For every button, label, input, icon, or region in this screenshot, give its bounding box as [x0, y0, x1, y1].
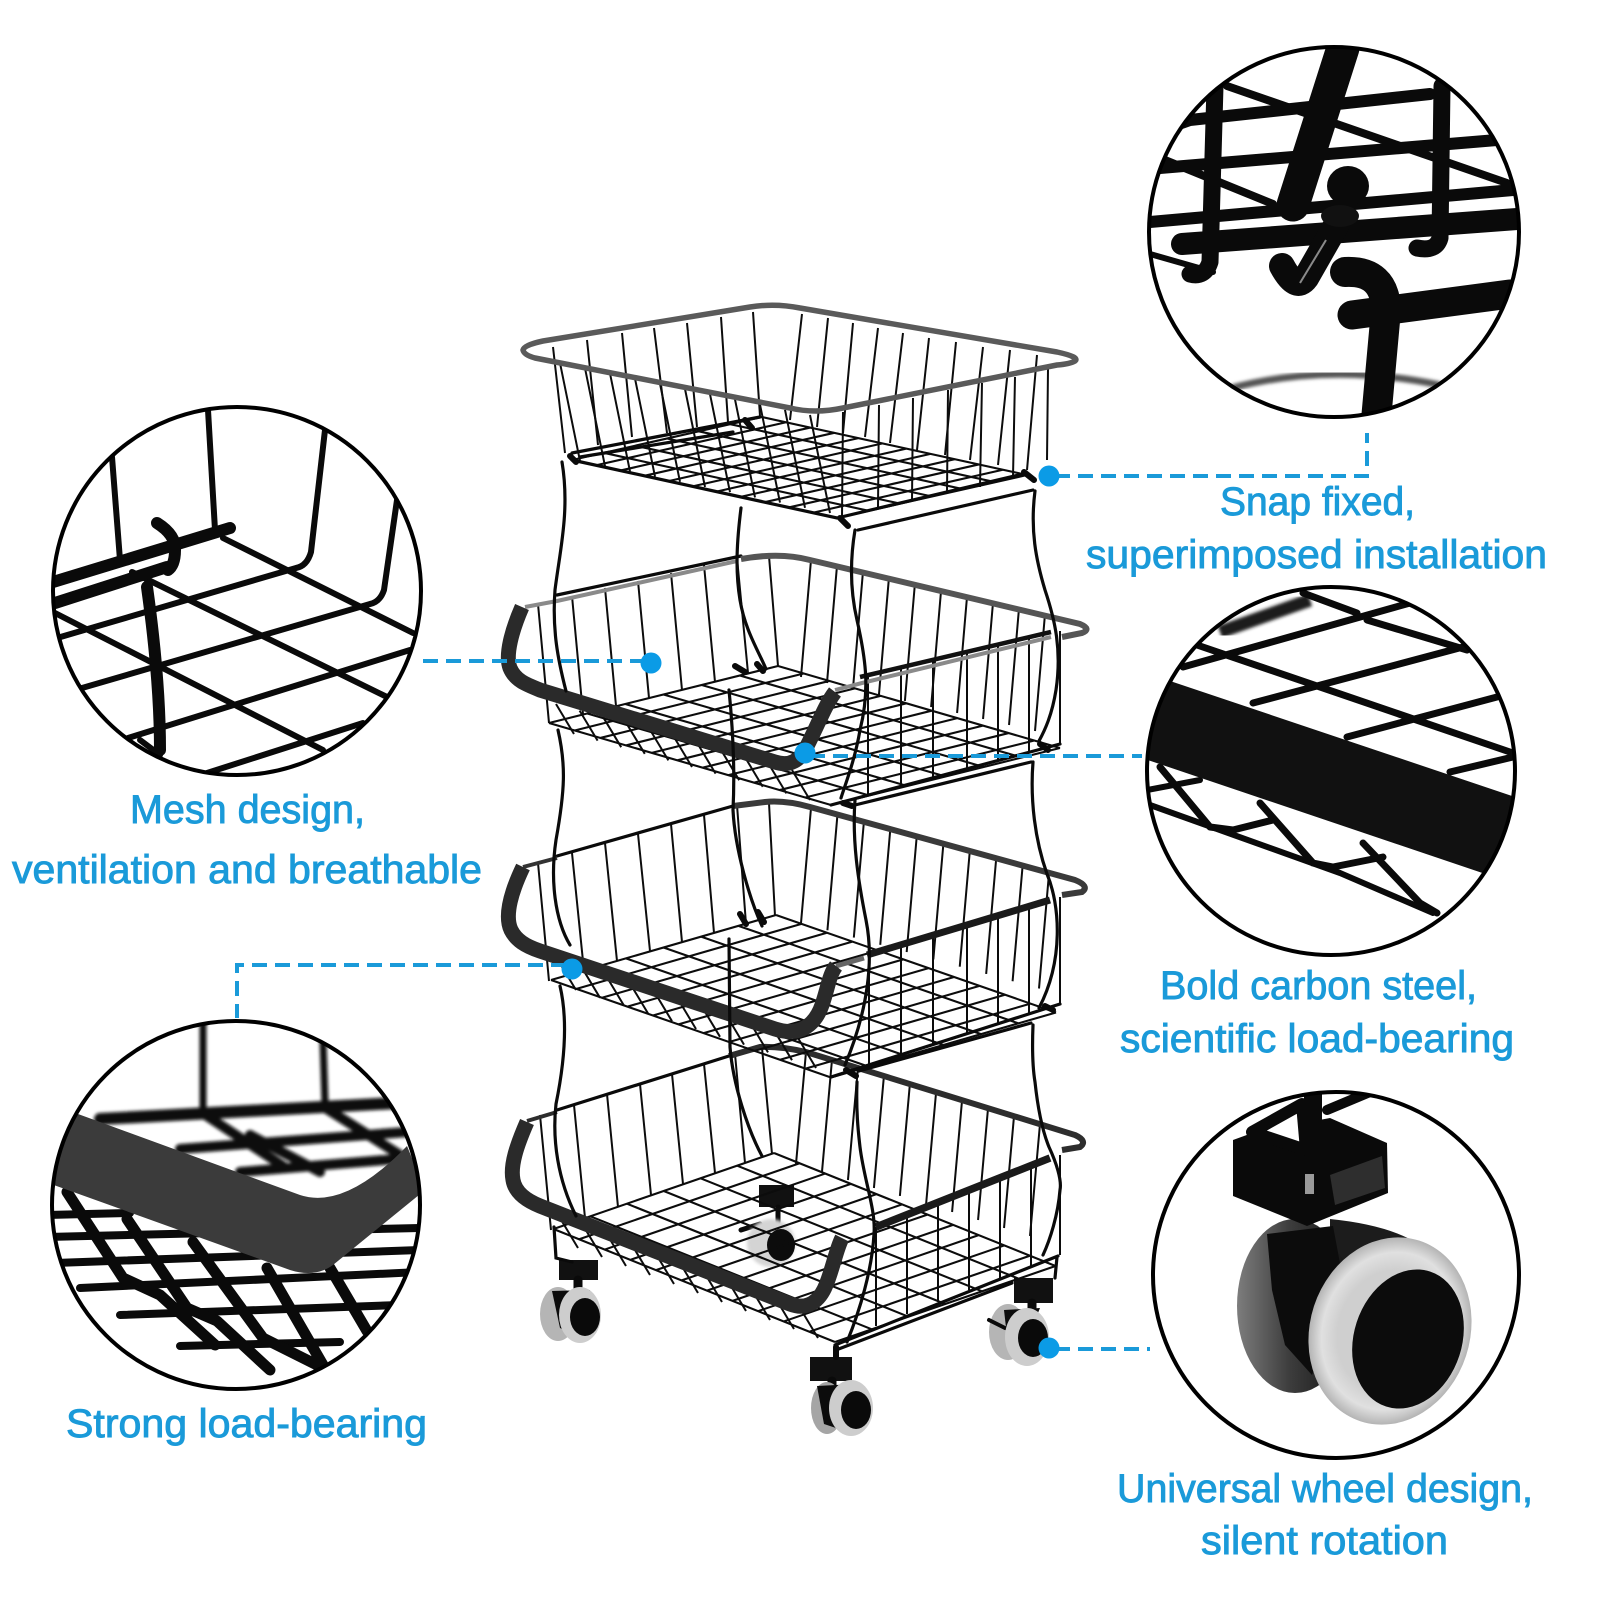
label: snap fixed: Snap fixed,: [1220, 480, 1415, 524]
circle outline: [1149, 47, 1519, 417]
basket 1 (top tier): [523, 305, 1076, 530]
label: snap fixed: superimposed installation: [1086, 533, 1547, 577]
circle outline: [52, 1021, 420, 1389]
label: universal wheel: Universal wheel design,: [1117, 1467, 1533, 1511]
callout panel: strong load-bearing detail: [40, 1020, 425, 1389]
callout panel: snap fixed detail: [1149, 47, 1519, 420]
photo: steel band close-up: [1130, 593, 1530, 913]
callout panel: bold carbon steel detail: [1130, 587, 1530, 955]
label: mesh design: ventilation and breathable: [12, 848, 482, 892]
product: four-tier wire basket cart: [508, 305, 1087, 1436]
leader: strong load-bearing: [237, 958, 582, 1018]
label: bold carbon steel: scientific load-bearing: [1120, 1017, 1514, 1061]
callout panel: mesh design detail: [53, 407, 421, 775]
circle outline: [53, 407, 421, 775]
label: universal wheel: [1117, 1467, 1533, 1563]
label: mesh design: Mesh design,: [130, 788, 365, 832]
label: strong load-bearing: Strong load-bearing: [66, 1402, 427, 1446]
label: bold carbon steel: Bold carbon steel,: [1160, 964, 1477, 1008]
leader: mesh design: [423, 652, 662, 674]
basket 3 (third tier): [508, 802, 1085, 1078]
label: universal wheel: silent rotation: [1201, 1519, 1448, 1563]
label: mesh design: [12, 788, 482, 892]
callout panel: universal wheel detail: [1153, 1090, 1519, 1458]
wheel: right caster: [989, 1278, 1053, 1366]
leader: bold carbon steel: [794, 742, 1142, 764]
circle outline: [1153, 1092, 1519, 1458]
photo: hook joint close-up: [1150, 48, 1517, 420]
wheel: left caster: [540, 1260, 601, 1343]
wheel: front caster: [810, 1347, 873, 1436]
cart side frame wires: [554, 420, 1060, 1342]
circle outline: [1147, 587, 1515, 955]
leader: snap fixed: [1038, 433, 1367, 486]
wheel: rear caster: [741, 1185, 795, 1267]
basket 2 (second tier): [508, 556, 1087, 805]
photo: caster wheel close-up: [1233, 1094, 1472, 1425]
leader: universal wheel: [1038, 1338, 1150, 1358]
photo: band and mesh close-up: [40, 1020, 425, 1370]
basket 4 (bottom tier): [512, 1047, 1083, 1350]
photo: mesh close-up: [53, 410, 413, 773]
label: snap fixed: [1086, 480, 1547, 577]
label: bold carbon steel: [1120, 964, 1514, 1061]
